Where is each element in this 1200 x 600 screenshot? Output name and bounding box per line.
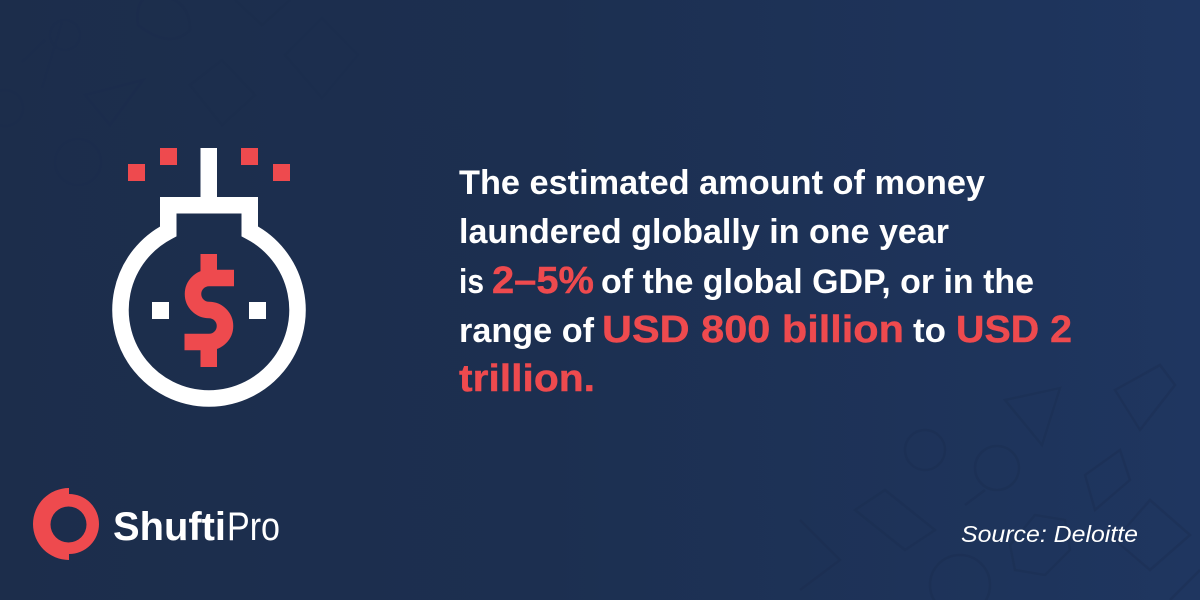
- logo wordmark: Shufti: [113, 505, 226, 549]
- dollar sign: [184, 254, 234, 367]
- white dots: [152, 302, 266, 319]
- main statement text: to: [913, 312, 946, 350]
- bomb fuse: [200, 148, 217, 204]
- logo wordmark: Pro: [227, 505, 280, 549]
- main statement text: The estimated amount of money: [459, 164, 985, 202]
- spark squares: [128, 148, 290, 181]
- logo mark: [33, 488, 99, 560]
- main statement text: USD 2: [956, 309, 1072, 351]
- icon: money bomb: [120, 148, 298, 398]
- main statement text: of the global GDP, or in the: [601, 263, 1034, 301]
- main statement text: 2–5%: [492, 260, 594, 302]
- bomb body outline: [120, 205, 298, 398]
- main statement text: is: [459, 263, 484, 301]
- logo: ShuftiPro: [33, 488, 280, 560]
- main statement text: range of: [459, 312, 595, 350]
- logo wordmark: [113, 505, 280, 549]
- main statement text: laundered globally in one year: [459, 213, 949, 251]
- main statement text: USD 800 billion: [602, 309, 904, 351]
- main statement text: [459, 164, 1072, 400]
- main statement text: trillion.: [459, 358, 595, 400]
- source note: Source: Deloitte: [961, 521, 1138, 547]
